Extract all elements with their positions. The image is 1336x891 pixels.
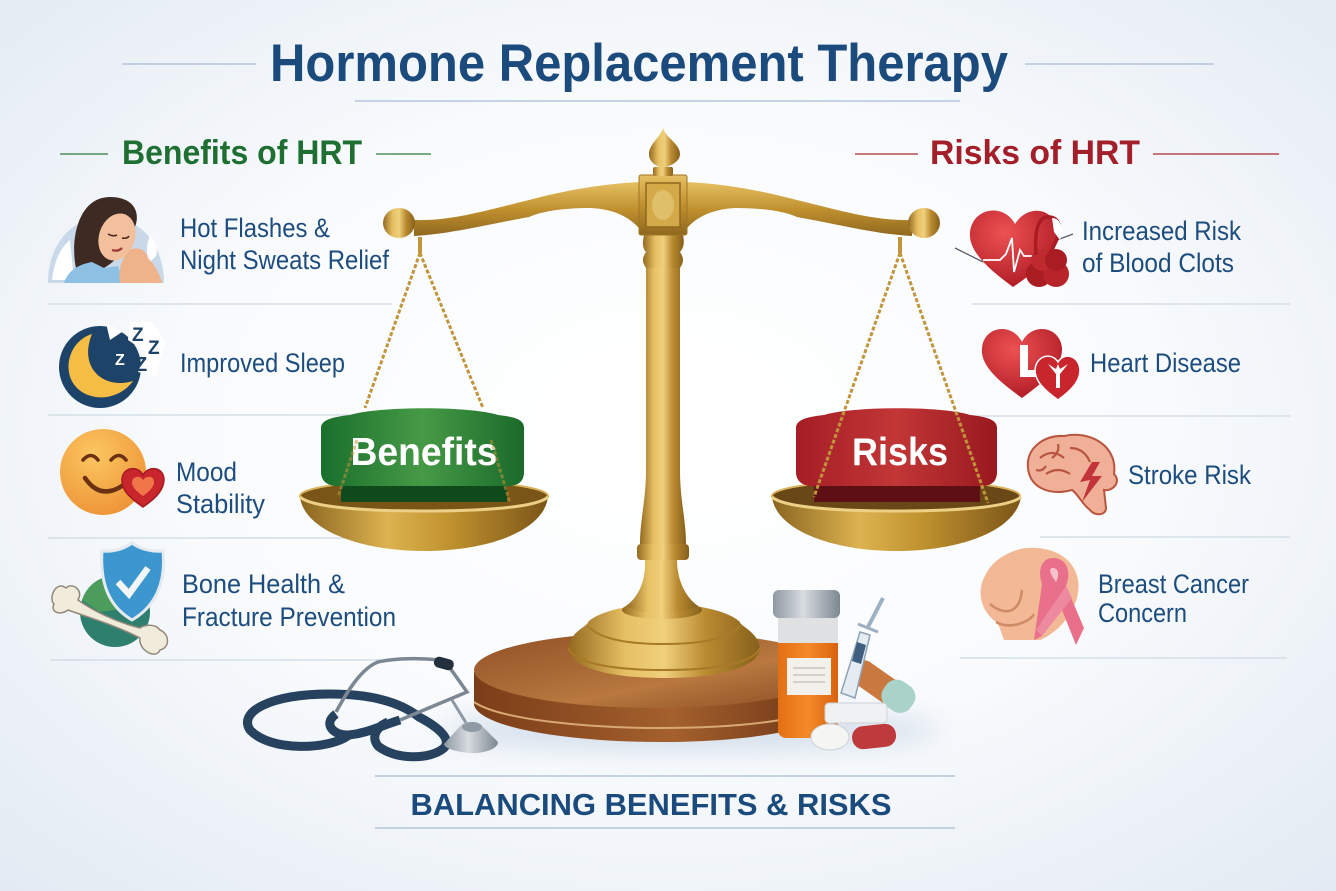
icon: smiling face and heart [60,429,164,515]
footer banner: BALANCING BENEFITS & RISKS [410,787,892,822]
wooden base [474,632,836,742]
right pan [772,237,1021,551]
label: Bone Health & [182,569,345,599]
icon: bone and shield [52,543,167,654]
scale [300,128,1021,678]
label: Night Sweats Relief [180,245,389,275]
bowl interior [772,480,1020,512]
bowl [300,497,548,551]
heading: benefits of HRT: Benefits of HRT [122,134,362,172]
stethoscope [248,656,498,757]
risks weight [796,408,997,502]
label: Increased Risk [1082,216,1241,246]
label: Breast Cancer [1098,569,1249,599]
risk: blood clots [955,210,1241,287]
risk: stroke [1028,435,1251,514]
footer banner [375,776,955,828]
finial [649,128,680,176]
label: Stability [176,489,265,519]
pills capsule [845,655,921,718]
soft shadow [440,710,940,750]
pills [811,703,897,750]
row dividers [48,304,1290,660]
icon: brain [1028,435,1117,514]
benefits weight: Benefits [350,431,498,474]
chains [338,237,510,503]
label: Hot Flashes & [180,213,330,243]
risks weight: Risks [852,431,948,474]
icon: breast and pink ribbon [981,548,1084,645]
medicine bottle [773,590,840,738]
heading: risks of HRT: Risks of HRT [930,134,1140,172]
benefit: mood stability [60,429,265,519]
bowl interior [300,480,548,512]
beam [383,175,940,238]
icon: moon: Z [132,325,144,346]
icon: moon: Z [115,352,125,369]
syringe [841,598,883,698]
title: Hormone Replacement Therapy [270,34,1008,93]
pillar [637,235,689,560]
chains [814,237,988,503]
icon: woman resting [48,197,164,283]
icon: moon: Z [135,354,147,376]
label: Improved Sleep [180,348,345,378]
icon: moon [59,322,166,408]
benefit: bone health [52,543,396,654]
benefit: improved sleep [59,322,345,408]
label: Stroke Risk [1128,460,1251,490]
label: Heart Disease [1090,348,1241,378]
benefit: hot flashes [48,197,389,283]
bowl [772,497,1021,551]
risk: breast cancer [981,548,1249,645]
risk: heart disease [982,329,1241,400]
title [122,34,1214,101]
pillar base [568,560,760,678]
left pan [300,237,548,551]
label: Mood [176,457,237,487]
icon: heart with pulse [955,210,1073,287]
icon: moon: Z [148,338,160,359]
label: of Blood Clots [1082,248,1234,278]
label: Concern [1098,598,1187,628]
icon: two hearts [982,329,1080,400]
label: Fracture Prevention [182,602,396,632]
benefits weight [321,408,524,502]
